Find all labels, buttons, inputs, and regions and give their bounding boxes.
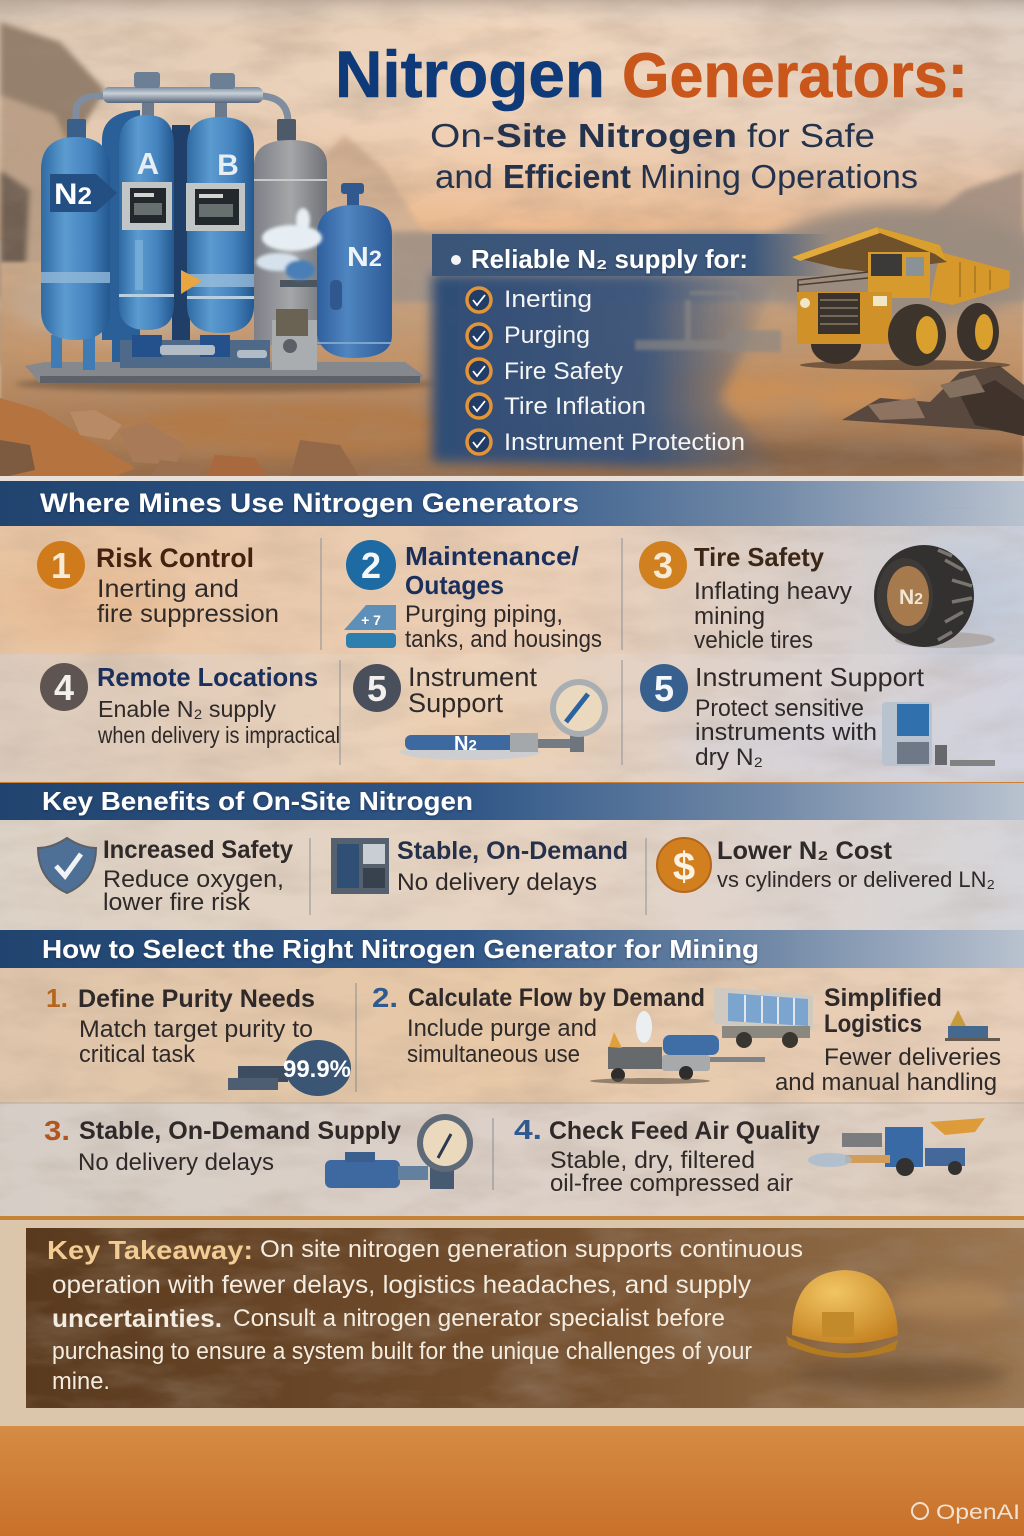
benefit: increased safety	[38, 836, 293, 916]
tank B: B	[217, 149, 239, 182]
card 6: instrument support with device: Instrument Support	[695, 662, 925, 692]
subtitle: On-	[430, 117, 495, 154]
left tank: N2	[54, 178, 92, 211]
card 6: instrument support with device: instruments with	[695, 719, 877, 746]
step 4: feed air: Stable, dry, filtered	[550, 1147, 755, 1174]
icon: small vehicle	[228, 1066, 288, 1090]
step 4: feed air	[514, 1114, 985, 1197]
list item: Fire Safety: Fire Safety	[504, 358, 623, 385]
text: simplified logistics: Fewer deliveries	[824, 1044, 1001, 1071]
card 6: instrument support with device: dry N₂	[695, 744, 763, 771]
benefit: lower cost: vs cylinders or delivered LN₂	[717, 867, 995, 892]
icon: tire: N2	[899, 586, 923, 609]
icon: purge tank: + 7	[361, 612, 381, 628]
card 3: tire safety: 3	[653, 545, 673, 586]
list item: Inerting	[467, 286, 592, 313]
step 4: feed air: Check Feed Air Quality	[549, 1117, 820, 1145]
front wheel	[888, 304, 946, 366]
takeaway text: purchasing to ensure a system built for the unique challenges of your	[52, 1338, 752, 1365]
list item: Instrument Protection: Instrument Protection	[504, 429, 745, 456]
benefit: increased safety: lower fire risk	[103, 889, 251, 916]
list item: Tire Inflation: Tire Inflation	[504, 393, 646, 420]
card 6: instrument support with device: 5	[654, 668, 674, 709]
benefit: lower cost: Lower N₂ Cost	[717, 837, 893, 865]
boulders in foreground	[0, 398, 360, 478]
right nitrogen tank	[317, 183, 392, 358]
step 2: calculate flow	[372, 982, 1001, 1096]
step 1: define purity: 1.	[46, 983, 68, 1013]
mottled texture	[0, 526, 1024, 782]
card 3: tire safety: mining	[694, 603, 765, 630]
card 1: risk control: 1	[51, 545, 71, 586]
benefit: stable on-demand	[331, 837, 628, 896]
panel: key takeaway	[0, 1216, 1024, 1426]
takeaway text: mine.	[52, 1368, 110, 1395]
subtitle: and	[435, 158, 493, 195]
illustration: nitrogen generator tanks	[15, 72, 435, 392]
step 1: define purity: critical task	[79, 1041, 196, 1068]
step 1: define purity: Match target purity to	[79, 1016, 313, 1043]
mottled texture	[0, 820, 1024, 930]
dump bed side	[930, 252, 1010, 305]
card 2: maintenance and outages: tanks, and housings	[405, 626, 602, 653]
takeaway text: Key Takeaway:	[47, 1235, 253, 1265]
text: simplified logistics: and manual handling	[775, 1069, 997, 1096]
list header band	[432, 234, 832, 276]
card 1: risk control	[37, 541, 279, 628]
icon: tire	[874, 545, 995, 648]
card 4: remote locations: when delivery is impractical	[97, 722, 340, 748]
subtitle: Site Nitrogen	[496, 117, 737, 154]
left tank	[41, 137, 117, 370]
list heading: Reliable N₂ supply for:	[471, 244, 748, 274]
text: simplified logistics: Simplified	[824, 984, 942, 1012]
heading band: key benefits: Key Benefits of On-Site Nitrogen	[42, 786, 473, 816]
benefit: increased safety: Reduce oxygen,	[103, 866, 284, 893]
card 4: remote locations: 4	[54, 667, 74, 708]
subtitle: for Safe	[747, 117, 875, 154]
step 1: define purity	[46, 983, 351, 1096]
column behind A and B	[102, 110, 270, 368]
icon: hard hat	[786, 1270, 898, 1358]
panel: key benefits	[0, 820, 1024, 930]
front body and grille	[797, 292, 892, 344]
takeaway text: operation with fewer delays, logistics headaches, and supply	[52, 1271, 752, 1299]
benefit: increased safety: Increased Safety	[103, 836, 293, 864]
steam cloud	[256, 208, 322, 280]
heading band: how to select	[0, 930, 1024, 968]
heading band: key benefits	[0, 783, 1024, 820]
text: simplified logistics	[775, 984, 1001, 1096]
canopy	[792, 227, 947, 272]
panel: selection steps	[0, 968, 1024, 1216]
step 2: calculate flow: Include purge and	[407, 1015, 597, 1042]
benefit: stable on-demand: Stable, On-Demand	[397, 837, 628, 865]
card 6: instrument support with device: Protect sensitive	[695, 695, 864, 722]
heading band: how to select: How to Select the Right Nitrogen Generator for Mining	[42, 934, 759, 964]
step 3: stable supply: Stable, On-Demand Supply	[79, 1117, 401, 1145]
panel: hero background with mine landscape	[0, 0, 1024, 478]
step 3: stable supply	[44, 1114, 473, 1189]
step 4: feed air: 4.	[514, 1114, 542, 1145]
list item: Purging: Purging	[504, 322, 590, 349]
icon: orange arrow	[181, 270, 202, 294]
tank B	[186, 117, 254, 333]
subtitle	[430, 117, 918, 195]
badge: purity	[283, 1040, 351, 1096]
step 3: stable supply: No delivery delays	[78, 1149, 274, 1176]
panel: reliable supply list	[432, 234, 832, 470]
step 2: calculate flow: simultaneous use	[407, 1041, 580, 1068]
bullet	[451, 255, 461, 265]
step 1: define purity: Define Purity Needs	[78, 985, 315, 1013]
card 3: tire safety: vehicle tires	[694, 627, 813, 654]
left front wheel	[811, 324, 861, 364]
cab	[868, 252, 930, 298]
title: Nitrogen	[335, 37, 605, 111]
card 1: risk control: fire suppression	[97, 600, 279, 628]
text: simplified logistics: Logistics	[824, 1010, 922, 1038]
card 2: maintenance and outages	[344, 540, 602, 653]
illustration: distant plant	[635, 291, 781, 352]
badge: purity: 99.9%	[283, 1056, 351, 1083]
card 1: risk control: Inerting and	[97, 575, 239, 603]
card 3: tire safety: Tire Safety	[694, 542, 825, 572]
card 3: tire safety	[639, 541, 995, 654]
benefit: lower cost: $	[673, 845, 695, 889]
list item: Purging	[467, 322, 590, 349]
card 6: instrument support with device	[640, 662, 995, 771]
step 2: calculate flow: Calculate Flow by Demand	[408, 984, 705, 1012]
heading band: where mines use	[0, 476, 1024, 526]
step 3: stable supply: 3.	[44, 1115, 70, 1146]
icon: instrument cabinet	[882, 702, 995, 766]
title	[335, 37, 968, 111]
card 4: remote locations: Remote Locations	[97, 662, 318, 692]
mottled texture	[0, 968, 1024, 1216]
mottled texture	[26, 1228, 1024, 1408]
card 1: risk control: Risk Control	[96, 543, 254, 573]
card 4: remote locations	[40, 662, 340, 748]
illustration: trailer and truck	[590, 987, 813, 1084]
heading band: where mines use: Where Mines Use Nitrogen Generators	[40, 488, 579, 518]
tank A	[119, 115, 174, 330]
watermark: OpenAI: OpenAI	[936, 1501, 1020, 1524]
right nitrogen tank: N2	[347, 241, 382, 272]
icon: compressor and gauge	[325, 1114, 473, 1189]
footer band	[0, 1426, 1024, 1536]
mottled paint texture	[0, 0, 1024, 478]
icon: gauge and pipe	[400, 679, 608, 760]
takeaway text: Consult a nitrogen generator specialist before	[233, 1305, 725, 1332]
list item: Inerting: Inerting	[504, 286, 592, 313]
card 5: instrument support with gauge: 5	[367, 668, 387, 709]
illustration: blue utility truck	[808, 1118, 985, 1176]
icon: gauge and pipe: N2	[454, 733, 477, 755]
rocks at right of hero	[842, 366, 1024, 436]
card 5: instrument support with gauge: Support	[408, 688, 503, 718]
benefit: lower cost	[657, 837, 995, 892]
tank A: A	[137, 146, 159, 181]
panel: where mines use cards	[0, 526, 1024, 782]
takeaway text	[47, 1235, 803, 1395]
watermark: OpenAI	[912, 1501, 1020, 1524]
rear wheel	[957, 303, 999, 361]
icon: small logistics vehicle	[945, 1010, 1000, 1041]
grey tank	[254, 140, 327, 345]
top manifold pipe	[67, 72, 296, 141]
railing	[798, 272, 868, 297]
step 2: calculate flow: 2.	[372, 982, 398, 1013]
card 2: maintenance and outages: 2	[361, 545, 381, 586]
card 5: instrument support with gauge	[353, 662, 608, 760]
card 2: maintenance and outages: Outages	[405, 570, 504, 600]
takeaway text: On site nitrogen generation supports continuous	[260, 1236, 803, 1263]
card 3: tire safety: Inflating heavy	[694, 578, 852, 605]
illustration: yellow mining dump truck	[792, 227, 1010, 370]
card 4: remote locations: Enable N₂ supply	[98, 696, 277, 722]
icon: purge tank	[344, 605, 396, 648]
card 5: instrument support with gauge: Instrument	[408, 662, 537, 692]
step 4: feed air: oil-free compressed air	[550, 1170, 793, 1197]
card 2: maintenance and outages: Maintenance/	[405, 541, 579, 571]
subtitle: Efficient	[503, 158, 631, 195]
takeaway text: uncertainties.	[52, 1305, 222, 1333]
card 2: maintenance and outages: Purging piping,	[405, 601, 563, 628]
title: Generators:	[622, 41, 968, 111]
subtitle: Mining Operations	[640, 158, 918, 195]
machinery box	[272, 280, 330, 370]
benefit: stable on-demand: No delivery delays	[397, 869, 597, 896]
